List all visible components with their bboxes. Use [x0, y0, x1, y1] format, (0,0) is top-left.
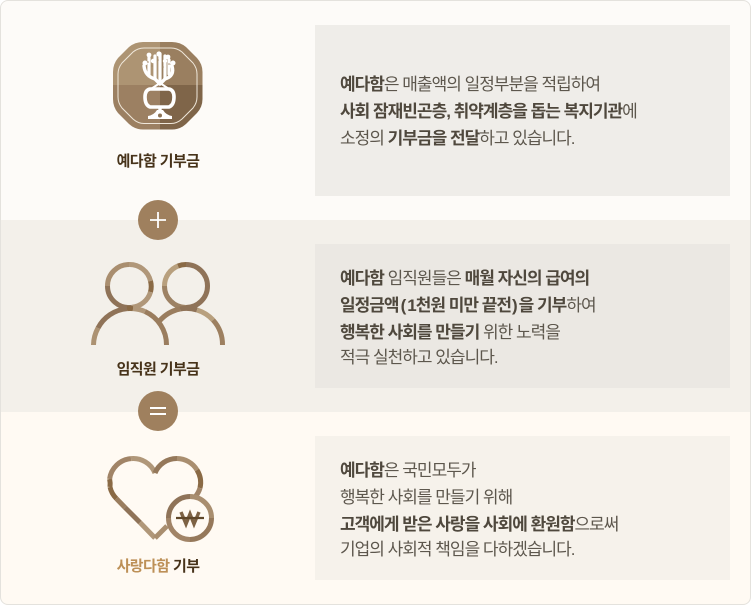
background band: top	[0, 0, 751, 220]
panel: corporate donation text	[315, 25, 730, 196]
panel: corporate donation text: 소정의 기부금을 전달하고 있습니다.	[340, 129, 575, 148]
panel: love donation text: 예다함은 국민모두가	[340, 461, 476, 480]
caption: love donation: 사랑다함 기부	[117, 558, 199, 575]
panel: employee donation text: 적극 실천하고 있습니다.	[340, 348, 498, 367]
panel: employee donation text: 예다함 임직원들은 매월 자신의 급여의	[340, 269, 589, 288]
caption: employee donation: 임직원 기부금	[117, 361, 199, 378]
panel: love donation text	[315, 436, 730, 580]
panel: corporate donation text: 사회 잠재빈곤층, 취약계층을 돕는 복지기관에	[340, 102, 637, 121]
icon: corporate emblem badge	[113, 42, 202, 130]
panel: love donation text: 행복한 사회를 만들기 위해	[340, 488, 512, 507]
caption: corporate donation: 예다함 기부금	[117, 153, 199, 170]
background band: middle	[0, 220, 751, 412]
panel: love donation text: 기업의 사회적 책임을 다하겠습니다.	[340, 540, 574, 559]
panel: corporate donation text: 예다함은 매출액의 일정부분을 적립하여	[340, 75, 600, 94]
panel: employee donation text: 일정금액(1천원 미만 끝전)을 기부하여	[340, 296, 596, 315]
panel: employee donation text: 행복한 사회를 만들기 위한 노력을	[340, 323, 560, 342]
panel: employee donation text	[315, 244, 730, 388]
panel: love donation text: 고객에게 받은 사랑을 사회에 환원함으로써	[340, 515, 618, 534]
background band: bottom	[0, 412, 751, 605]
